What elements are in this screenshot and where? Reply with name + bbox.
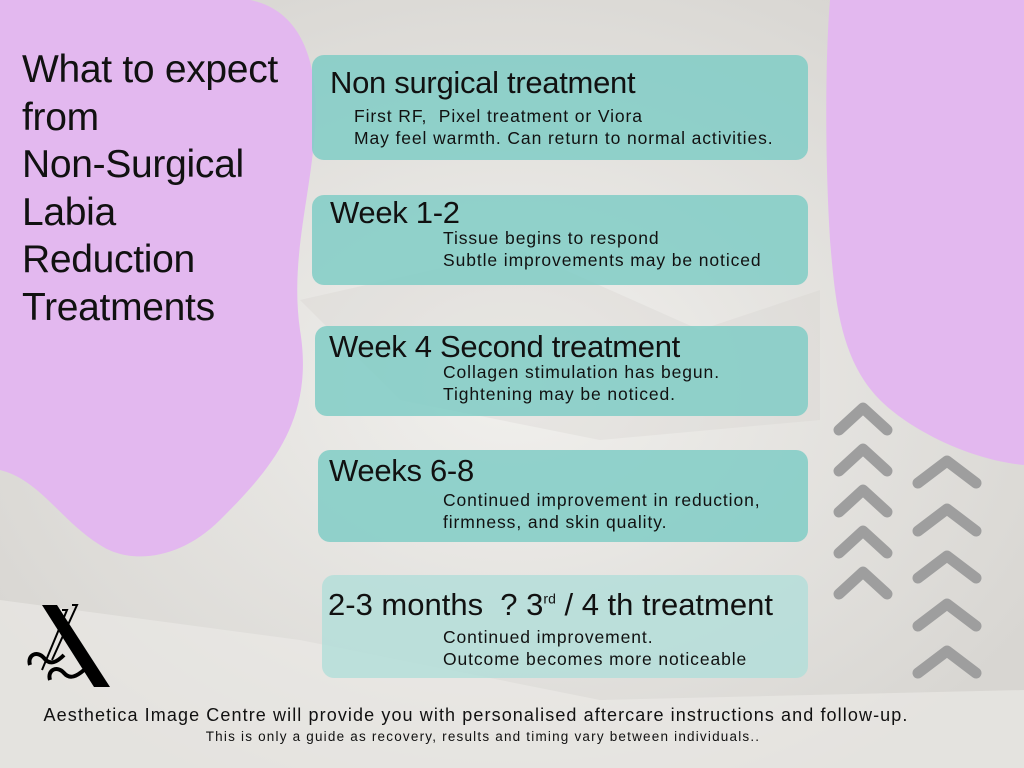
panel: week 1-2: Subtle improvements may be noticed: [443, 250, 762, 270]
panel: 2-3 months: Continued improvement.: [443, 627, 653, 647]
panel: week 4: Tightening may be noticed.: [443, 384, 676, 404]
footer text: Aesthetica Image Centre will provide you with personalised aftercare instructions and follow-up.: [44, 705, 908, 725]
disclaimer: This is only a guide as recovery, results and timing vary between individuals..: [206, 729, 760, 744]
title: from: [22, 96, 99, 138]
logo: [27, 604, 110, 687]
panel: weeks 6-8: firmness, and skin quality.: [443, 512, 667, 532]
title: Non-Surgical: [22, 143, 244, 186]
panel: non surgical treatment: First RF, Pixel treatment or Viora: [354, 106, 643, 126]
icon: chevrons: [834, 402, 982, 678]
title: Treatments: [22, 286, 215, 328]
panel: weeks 6-8: Continued improvement in reduction,: [443, 490, 760, 510]
panel: week 4: Collagen stimulation has begun.: [443, 362, 720, 382]
title: [22, 48, 278, 328]
panel: non surgical treatment: [312, 55, 808, 160]
panel: week 4: Week 4 Second treatment: [329, 329, 680, 364]
panel: week 1-2: Tissue begins to respond: [443, 228, 659, 248]
title: Labia: [22, 190, 116, 234]
panel: non surgical treatment: Non surgical treatment: [330, 65, 635, 100]
panel: week 1-2: Week 1-2: [330, 195, 460, 230]
purple blob right: [826, 0, 1024, 465]
panel: week 1-2: [312, 195, 808, 285]
panel: weeks 6-8: [318, 450, 808, 542]
purple blob left: [0, 0, 313, 556]
panel: 2-3 months: 2-3 months ? 3rd / 4 th treatment: [328, 587, 773, 622]
panel: weeks 6-8: Weeks 6-8: [329, 453, 474, 488]
title: Reduction: [22, 238, 195, 281]
title: What to expect: [22, 48, 278, 91]
panel: week 4: [315, 326, 808, 416]
panel: 2-3 months: [322, 575, 808, 678]
panel: 2-3 months: Outcome becomes more noticeable: [443, 649, 747, 669]
panel: non surgical treatment: May feel warmth. Can return to normal activities.: [354, 128, 774, 148]
